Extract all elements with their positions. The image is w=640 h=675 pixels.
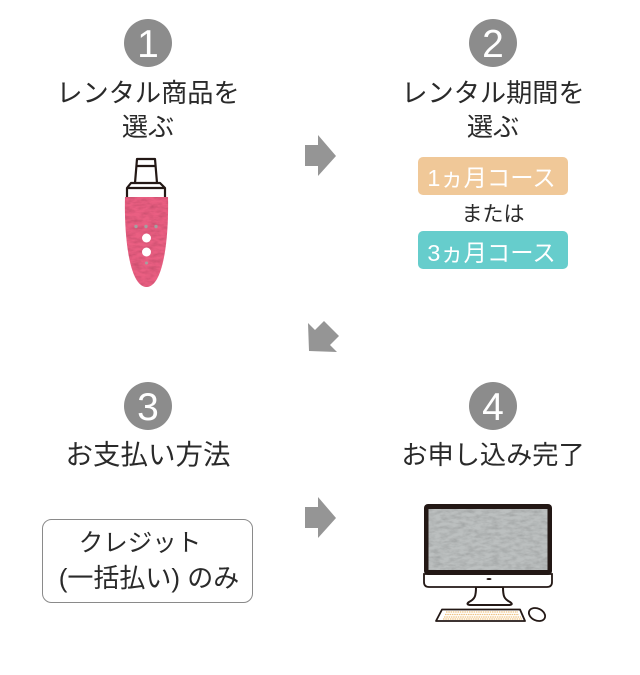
step 1	[56, 19, 240, 287]
step 2 heading: レンタル期間を	[401, 78, 585, 108]
step 1 number badge	[124, 19, 172, 67]
step 1 number badge: 1	[137, 23, 159, 66]
step 2 heading: 選ぶ	[467, 112, 519, 142]
text: or: または	[462, 203, 524, 226]
step 4	[401, 382, 585, 624]
step 2 number badge: 2	[482, 23, 504, 66]
step 3 heading: お支払い方法	[66, 439, 230, 470]
icon: desktop computer	[424, 504, 552, 624]
button: 3 month course: 3ヵ月コース	[427, 240, 556, 266]
button: 3 month course	[418, 231, 568, 269]
button: 1 month course	[418, 157, 568, 195]
arrow: step 1 to step 2	[305, 135, 336, 176]
payment method box	[42, 520, 252, 602]
step 4 heading: お申し込み完了	[401, 440, 585, 470]
step 1 heading: 選ぶ	[122, 112, 174, 142]
step 3 number badge: 3	[137, 386, 159, 429]
step 3	[42, 382, 252, 602]
step 2 number badge	[469, 19, 517, 67]
payment method box: (一括払い) のみ	[59, 563, 239, 593]
step 2	[401, 19, 585, 269]
step 3 number badge	[124, 382, 172, 430]
button: 1 month course: 1ヵ月コース	[427, 165, 556, 191]
step 4 number badge	[469, 382, 517, 430]
arrow: step 3 to step 4	[305, 497, 336, 538]
step 4 number badge: 4	[482, 386, 504, 429]
step 1 heading: レンタル商品を	[56, 78, 240, 108]
icon: pink facial device	[125, 159, 168, 287]
payment method box: クレジット	[79, 530, 201, 557]
arrow: step 2 to step 3	[308, 321, 339, 352]
